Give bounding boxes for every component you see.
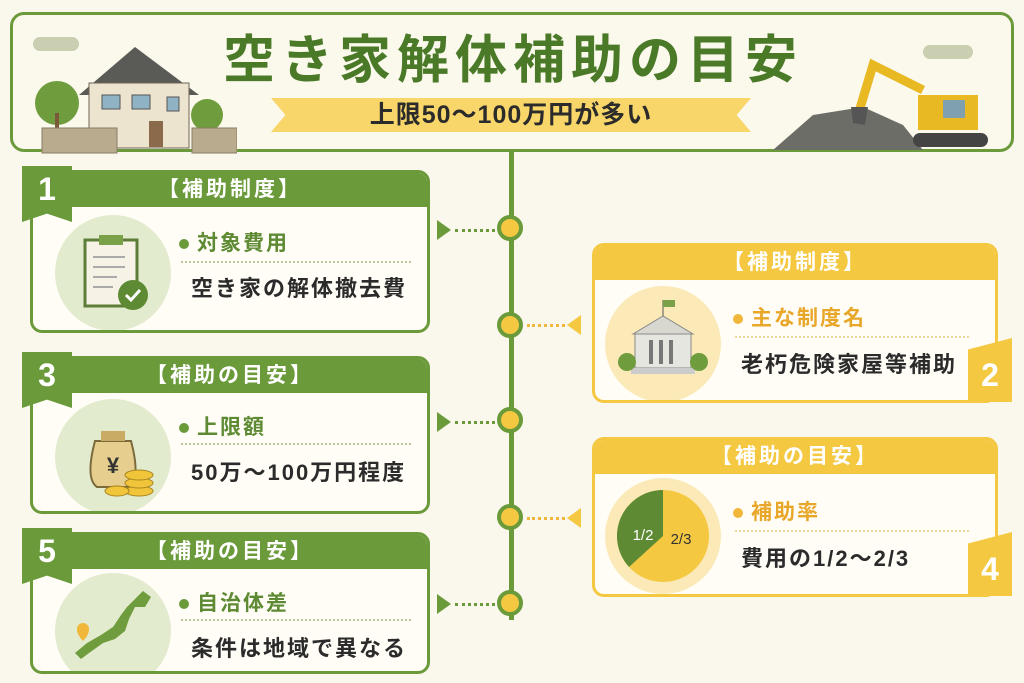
tab 5 — [22, 528, 72, 584]
icon: japan map — [55, 573, 171, 683]
panel: card 5: 【補助の目安】 — [146, 540, 314, 563]
icon: cloud right — [923, 45, 973, 59]
icon: money bag: ¥ — [107, 453, 120, 478]
panel: card 4: 【補助の目安】 — [711, 445, 879, 468]
subtitle ribbon: 上限50〜100万円が多い — [370, 101, 652, 129]
icon: house — [35, 47, 237, 154]
body text: 費用の1/2〜2/3 — [741, 546, 910, 571]
tab 2 — [968, 338, 1012, 402]
label: 主な制度名 — [751, 307, 866, 330]
panel: card 3: 【補助の目安】 — [146, 364, 314, 387]
icon: cloud left — [33, 37, 79, 51]
panel: card 1: 【補助制度】 — [158, 178, 302, 201]
tab 1: 1 — [38, 171, 56, 207]
tab 5: 5 — [38, 533, 56, 569]
icon: clipboard — [55, 215, 171, 331]
timeline nodes — [497, 215, 523, 616]
icon: money bag — [55, 399, 171, 515]
body text: 条件は地域で異なる — [191, 636, 407, 661]
label: 自治体差 — [197, 592, 289, 615]
arrow 4 — [527, 508, 581, 528]
panel: card 5 — [30, 532, 430, 674]
pie chart — [605, 478, 721, 594]
panel: card 1 — [30, 170, 430, 333]
tab 4: 4 — [981, 551, 999, 587]
label: 対象費用 — [197, 232, 289, 255]
arrow 1 — [437, 220, 495, 240]
arrow 5 — [437, 594, 495, 614]
body text: 老朽危険家屋等補助 — [741, 352, 957, 377]
panel: card 3 — [30, 356, 430, 514]
tab 4 — [968, 532, 1012, 596]
label: 補助率 — [751, 501, 820, 524]
pie chart: 2/3 — [671, 531, 691, 548]
panel: card 2 — [592, 243, 998, 403]
icon: government building — [605, 286, 721, 402]
pie chart: 1/2 — [633, 527, 653, 544]
icon: excavator and rubble — [773, 58, 988, 150]
label: 上限額 — [197, 416, 266, 439]
timeline line — [509, 150, 514, 620]
body text: 50万〜100万円程度 — [191, 460, 406, 485]
title: 空き家解体補助の目安 — [223, 32, 803, 90]
arrow 2 — [527, 315, 581, 335]
tab 2: 2 — [981, 357, 999, 393]
tab 1 — [22, 166, 72, 222]
header panel — [10, 12, 1014, 152]
body text: 空き家の解体撤去費 — [191, 276, 407, 301]
panel: card 4 — [592, 437, 998, 597]
tab 3: 3 — [38, 357, 56, 393]
tab 3 — [22, 352, 72, 408]
panel: card 2: 【補助制度】 — [723, 251, 867, 274]
subtitle ribbon — [271, 98, 751, 132]
arrow 3 — [437, 412, 495, 432]
